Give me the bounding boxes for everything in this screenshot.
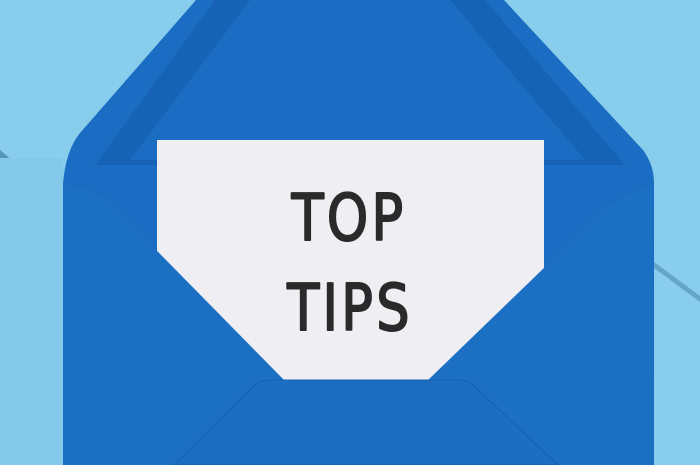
text: TIPS: TIPS — [286, 271, 413, 345]
card — [157, 140, 544, 385]
text: TOP: TOP — [291, 181, 406, 255]
flap gum stripe — [95, 0, 625, 165]
bottom flap — [174, 380, 558, 465]
envelope front pocket — [63, 185, 654, 465]
